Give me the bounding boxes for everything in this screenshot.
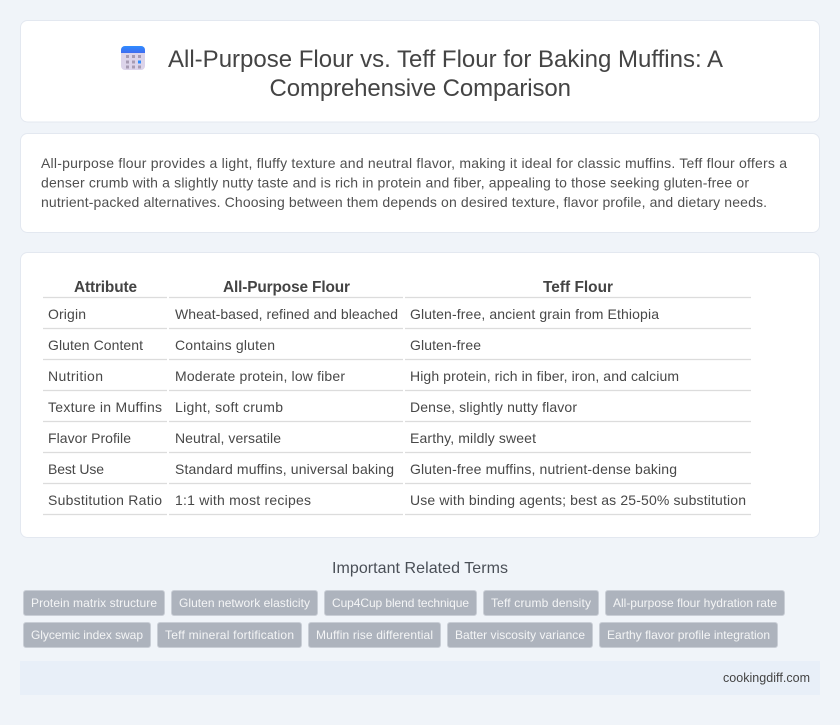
row: substitution ratio	[48, 492, 746, 508]
icon: calendar	[121, 46, 145, 70]
intro paragraph: nutrient-packed alternatives. Choosing between them depends on desired texture, flavor profile, and dietary needs.	[41, 194, 767, 210]
tag: teff mineral fortification	[158, 622, 302, 648]
tag: gluten network elasticity: Gluten network elasticity	[179, 596, 310, 610]
row: texture in muffins: Texture in Muffins	[48, 399, 162, 415]
tag: all-purpose flour hydration rate	[606, 590, 784, 616]
table header: Attribute	[74, 279, 137, 296]
related term tags	[24, 590, 784, 648]
row: gluten content: Contains gluten	[175, 337, 275, 353]
heading: important related terms: Important Related Terms	[332, 560, 508, 577]
panel: title	[20, 20, 820, 122]
row: origin: Origin	[48, 306, 86, 322]
panel: introduction	[20, 134, 820, 232]
row: best use	[48, 461, 677, 477]
row: origin: Wheat-based, refined and bleached	[175, 306, 398, 322]
tag: protein matrix structure: Protein matrix structure	[31, 596, 157, 610]
row: origin: Gluten-free, ancient grain from Ethiopia	[410, 306, 659, 322]
tag: gluten network elasticity	[172, 590, 318, 616]
tag: all-purpose flour hydration rate: All-purpose flour hydration rate	[613, 596, 777, 610]
row: substitution ratio: Use with binding agents; best as 25-50% substitution	[410, 492, 746, 508]
table grid lines	[43, 298, 751, 514]
footer	[20, 661, 820, 695]
tag: cup4cup blend technique	[324, 590, 476, 616]
tag: batter viscosity variance	[448, 622, 592, 648]
row: texture in muffins	[48, 399, 577, 415]
tag: earthy flavor profile integration	[600, 622, 778, 648]
tag: muffin rise differential: Muffin rise differential	[316, 628, 433, 642]
tag: muffin rise differential	[308, 622, 440, 648]
tag: teff mineral fortification: Teff mineral fortification	[165, 628, 294, 642]
table header: All-Purpose Flour	[223, 279, 350, 296]
row: substitution ratio: 1:1 with most recipes	[175, 492, 311, 508]
row: flavor profile: Flavor Profile	[48, 430, 131, 446]
row: flavor profile: Neutral, versatile	[175, 430, 281, 446]
tag: teff crumb density: Teff crumb density	[491, 596, 591, 610]
row: flavor profile: Earthy, mildly sweet	[410, 430, 536, 446]
row: origin	[48, 306, 659, 322]
title text: All-Purpose Flour vs. Teff Flour for Baking Muffins: A	[168, 46, 723, 73]
panel: comparison table	[20, 252, 820, 538]
tag: glycemic index swap: Glycemic index swap	[31, 628, 143, 642]
row: nutrition: High protein, rich in fiber, iron, and calcium	[410, 368, 679, 384]
title text: Comprehensive Comparison	[270, 75, 571, 102]
intro paragraph: denser crumb with a slightly nutty taste and is rich in protein and fiber, appealing to those seeking gluten-free or	[41, 174, 749, 190]
row: gluten content: Gluten-free	[410, 337, 481, 353]
table header	[74, 279, 613, 296]
row: gluten content	[48, 337, 481, 353]
row: best use: Standard muffins, universal baking	[175, 461, 394, 477]
tag: cup4cup blend technique: Cup4Cup blend technique	[332, 596, 469, 610]
row: texture in muffins: Dense, slightly nutty flavor	[410, 399, 577, 415]
tag: earthy flavor profile integration: Earthy flavor profile integration	[607, 628, 770, 642]
row: nutrition: Nutrition	[48, 368, 103, 384]
intro paragraph: All-purpose flour provides a light, fluffy texture and neutral flavor, making it ideal for classic muffins. Teff flour offers a	[41, 155, 787, 171]
tag: batter viscosity variance: Batter viscosity variance	[455, 628, 585, 642]
row: nutrition	[48, 368, 679, 384]
row: best use: Best Use	[48, 461, 104, 477]
row: gluten content: Gluten Content	[48, 337, 143, 353]
row: flavor profile	[48, 430, 536, 446]
tag: glycemic index swap	[24, 622, 150, 648]
row: texture in muffins: Light, soft crumb	[175, 399, 283, 415]
tag: protein matrix structure	[24, 590, 164, 616]
row: substitution ratio: Substitution Ratio	[48, 492, 162, 508]
tag: teff crumb density	[484, 590, 598, 616]
row: nutrition: Moderate protein, low fiber	[175, 368, 345, 384]
row: best use: Gluten-free muffins, nutrient-dense baking	[410, 461, 677, 477]
table header: Teff Flour	[543, 279, 613, 296]
footer: cookingdiff.com	[723, 671, 810, 685]
